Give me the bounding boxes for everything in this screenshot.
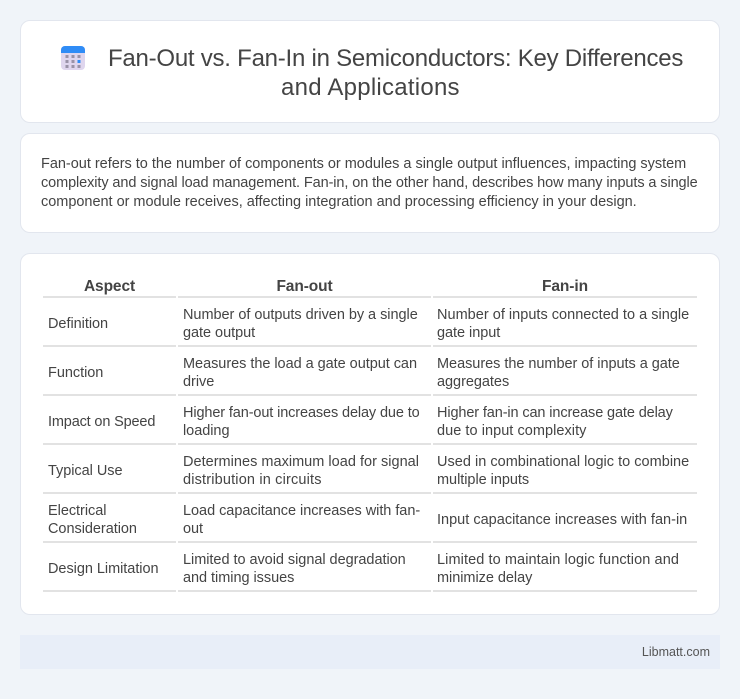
row: Electrical Consideration: Input capacitance increases with fan-in: [437, 512, 687, 528]
footer text: Libmatt.com: [642, 645, 710, 659]
table header: Aspect: Aspect: [84, 278, 135, 295]
row: Typical Use: [48, 454, 689, 488]
table header: Fan-in: Fan-in: [542, 278, 588, 295]
row: Definition: Number of inputs connected to a single: [437, 307, 689, 323]
row: Typical Use: Used in combinational logic to combine: [437, 454, 689, 470]
table header: Fan-out: Fan-out: [276, 278, 333, 295]
row: Impact on Speed: Higher fan-out increases delay due to: [183, 405, 420, 421]
row: Function: Function: [48, 365, 103, 381]
row: Definition: gate input: [437, 325, 500, 341]
row: Electrical Consideration: Load capacitance increases with fan-: [183, 503, 420, 519]
row: Impact on Speed: loading: [183, 423, 229, 439]
row: Function: aggregates: [437, 374, 509, 390]
title: [108, 45, 683, 101]
text: intro line 1: Fan-out refers to the number of components or modules a single output influences, impacting system: [41, 156, 686, 172]
panel: comparison table: [20, 253, 720, 615]
panel: title card: [20, 20, 720, 123]
row: Definition: Number of outputs driven by a single: [183, 307, 418, 323]
row: Impact on Speed: Impact on Speed: [48, 414, 155, 430]
row: Design Limitation: Design Limitation: [48, 561, 159, 577]
row: Function: drive: [183, 374, 214, 390]
row: Function: Measures the load a gate output can: [183, 356, 417, 372]
row: Electrical Consideration: [48, 503, 687, 537]
row: Typical Use: distribution in circuits: [183, 472, 322, 488]
row: Impact on Speed: Higher fan-in can increase gate delay: [437, 405, 673, 421]
row: Design Limitation: and timing issues: [183, 570, 294, 586]
row: Impact on Speed: [48, 405, 673, 439]
row: Design Limitation: [48, 552, 679, 586]
row: Definition: gate output: [183, 325, 255, 341]
panel: introduction text: [20, 133, 720, 233]
row: Electrical Consideration: Consideration: [48, 521, 137, 537]
title: Fan-Out vs. Fan-In in Semiconductors: Key Differences: [108, 45, 683, 72]
row: Typical Use: Typical Use: [48, 463, 123, 479]
text: intro line 2: complexity and signal load management. Fan-in, on the other hand, describes how many inputs a single: [41, 175, 698, 191]
icon: calendar grid: [61, 46, 85, 70]
row: Design Limitation: Limited to avoid signal degradation: [183, 552, 406, 568]
row: Function: Measures the number of inputs a gate: [437, 356, 680, 372]
row: Design Limitation: Limited to maintain logic function and: [437, 552, 679, 568]
row: Electrical Consideration: out: [183, 521, 203, 537]
row: Definition: Definition: [48, 316, 108, 332]
row: Electrical Consideration: Electrical: [48, 503, 106, 519]
row: Impact on Speed: due to input complexity: [437, 423, 586, 439]
row: Typical Use: Determines maximum load for signal: [183, 454, 419, 470]
row: Design Limitation: minimize delay: [437, 570, 532, 586]
row: Function: [48, 356, 680, 390]
text: intro line 3: component or module receives, affecting integration and processing efficiency in your design.: [41, 194, 637, 210]
title: and Applications: [281, 74, 460, 101]
row: Definition: [48, 307, 689, 341]
footer bar: [20, 635, 720, 669]
row: Typical Use: multiple inputs: [437, 472, 529, 488]
